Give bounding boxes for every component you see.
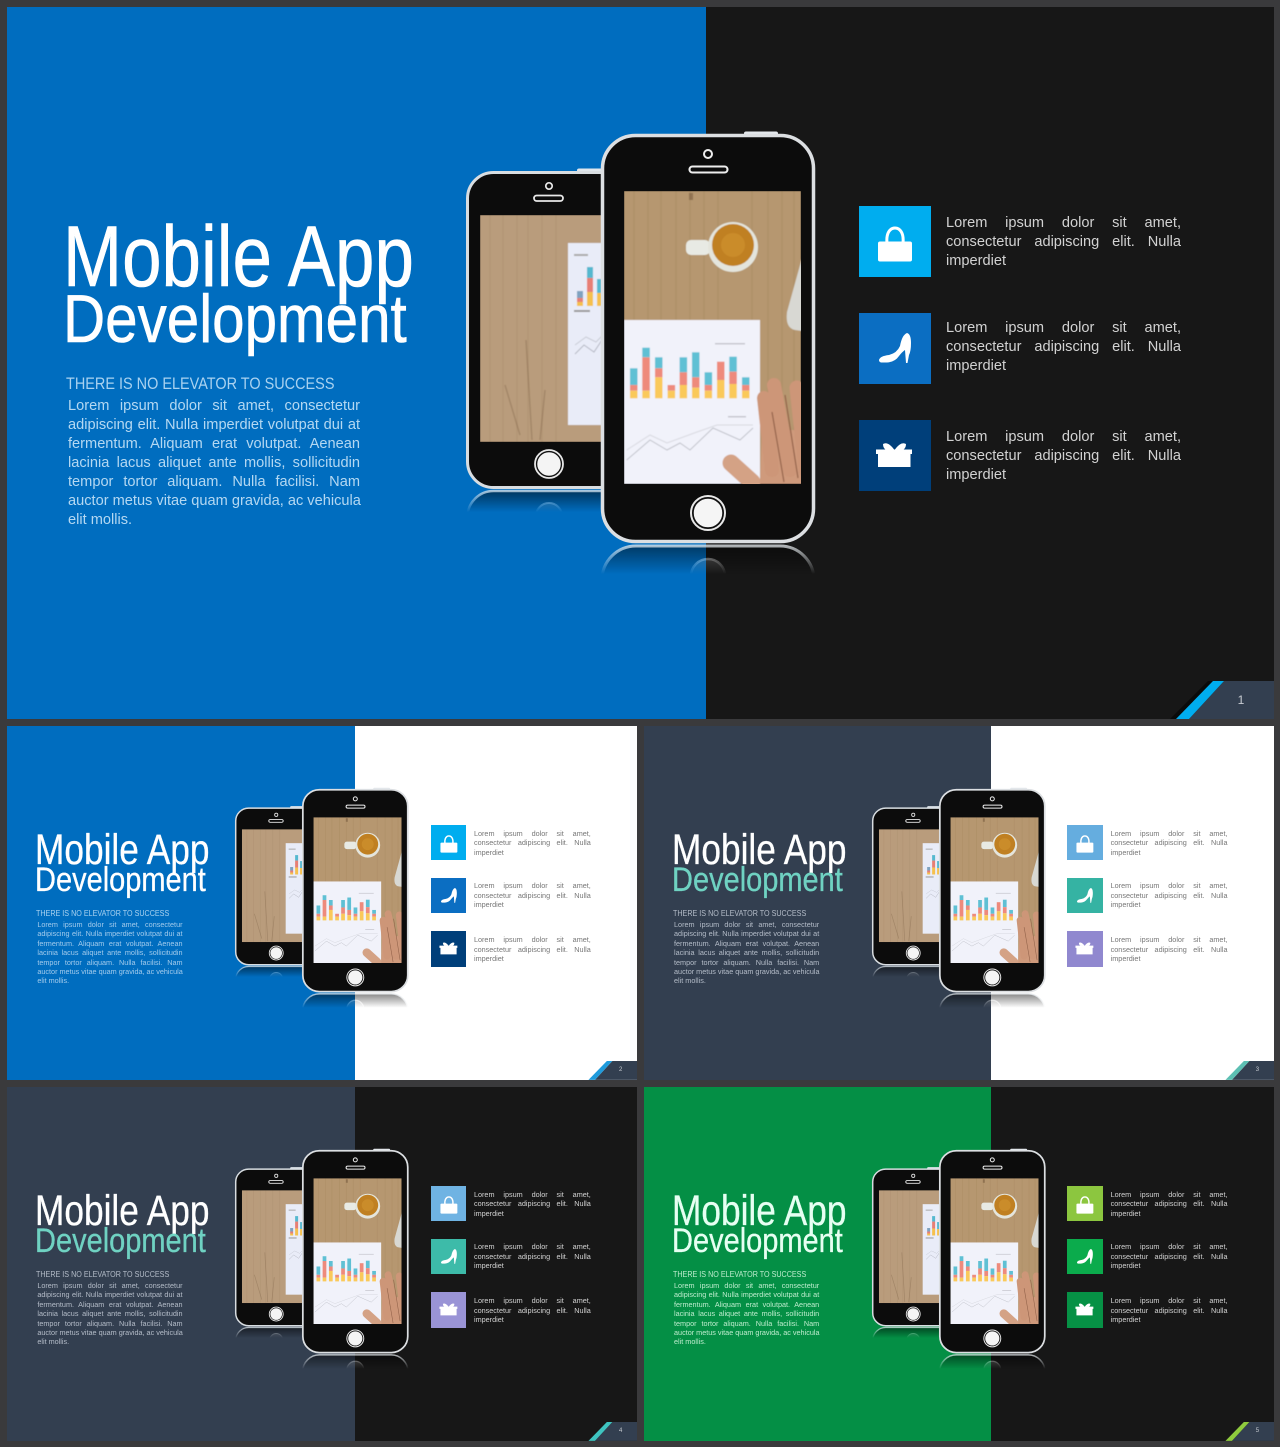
feature text 2: consectetur adipiscing elit. Nulla: [946, 339, 1181, 355]
corner accent: [1226, 1061, 1274, 1080]
feature text 1: consectetur adipiscing elit. Nulla: [474, 1199, 591, 1208]
body text: lacinia lacus aliquet ante mollis, sollicitudin: [68, 455, 360, 471]
body text: lacinia lacus aliquet ante mollis, sollicitudin: [37, 1309, 183, 1318]
subheading: THERE IS NO ELEVATOR TO SUCCESS: [673, 908, 806, 918]
title: Development: [63, 281, 407, 357]
feature text 3: consectetur adipiscing elit. Nulla: [1111, 1306, 1228, 1315]
feature text 1: Lorem ipsum dolor sit amet,: [474, 1190, 591, 1199]
slide 1: blue and black large slide: [7, 7, 1274, 719]
icon: gift: [1067, 931, 1103, 967]
feature text 2: [474, 881, 591, 909]
subheading: THERE IS NO ELEVATOR TO SUCCESS: [673, 1268, 806, 1278]
slide 3: navy and white: [644, 726, 1274, 1080]
feature text 3: imperdiet: [1111, 954, 1140, 963]
feature text 3: Lorem ipsum dolor sit amet,: [946, 429, 1181, 445]
body text: adipiscing elit. Nulla imperdiet volutpat dui at: [37, 1290, 183, 1299]
body text: tempor tortor aliquam. Nulla facilisi. Nam: [37, 1319, 183, 1328]
body text: [37, 1281, 183, 1346]
feature text 2: Lorem ipsum dolor sit amet,: [474, 881, 591, 890]
body text: tempor tortor aliquam. Nulla facilisi. Nam: [37, 958, 183, 967]
corner accent: [1170, 681, 1274, 719]
phones mockup: [234, 788, 409, 1007]
title: Development: [35, 861, 206, 899]
body text: elit mollis.: [674, 1337, 706, 1346]
icon: gift: [431, 1292, 466, 1328]
feature text 1: imperdiet: [474, 1209, 504, 1218]
feature text 1: consectetur adipiscing elit. Nulla: [946, 234, 1181, 250]
icon: high heel: [1067, 878, 1103, 913]
feature text 3: Lorem ipsum dolor sit amet,: [1111, 1296, 1228, 1305]
body text: auctor metus vitae quam gravida, ac vehicula: [37, 967, 183, 976]
page number: 2: [619, 1067, 622, 1073]
body text: tempor tortor aliquam. Nulla facilisi. Nam: [68, 474, 360, 490]
feature text 3: imperdiet: [1111, 1315, 1140, 1324]
feature text 2: consectetur adipiscing elit. Nulla: [1111, 1252, 1228, 1261]
body text: Lorem ipsum dolor sit amet, consectetur: [37, 920, 183, 929]
title: Development: [35, 1222, 206, 1260]
icon: high heel: [1067, 1239, 1103, 1274]
slide 5: green and black: [644, 1087, 1274, 1441]
body text: adipiscing elit. Nulla imperdiet volutpat dui at: [68, 417, 360, 433]
subheading: THERE IS NO ELEVATOR TO SUCCESS: [36, 908, 170, 918]
panel: blue left panel: [7, 7, 706, 719]
feature text 2: [1110, 1242, 1228, 1270]
body text: elit mollis.: [68, 512, 132, 528]
feature text 3: consectetur adipiscing elit. Nulla: [1111, 945, 1228, 954]
title: Mobile App: [35, 1187, 209, 1235]
body text: [68, 398, 361, 528]
body text: elit mollis.: [37, 976, 69, 985]
title: Development: [672, 1222, 842, 1260]
feature text 1: consectetur adipiscing elit. Nulla: [1111, 838, 1228, 847]
feature text 3: imperdiet: [946, 467, 1006, 483]
feature text 2: imperdiet: [474, 900, 504, 909]
icon: gift: [1067, 1292, 1103, 1328]
feature text 1: imperdiet: [1111, 848, 1140, 857]
title: Mobile App: [672, 1187, 846, 1235]
body text: elit mollis.: [37, 1337, 69, 1346]
slide 4: navy and black: [7, 1087, 637, 1441]
panel: navy left panel: [7, 1087, 355, 1441]
page number: 3: [1256, 1067, 1259, 1073]
feature text 2: [474, 1242, 591, 1270]
page number: 4: [619, 1428, 622, 1434]
icon: high heel: [431, 878, 466, 913]
feature text 1: Lorem ipsum dolor sit amet,: [474, 829, 591, 838]
body text: [674, 920, 820, 985]
body text: fermentum. Aliquam erat volutpat. Aenean: [68, 436, 360, 452]
feature text 1: [1110, 1190, 1228, 1218]
icon: gift: [859, 420, 931, 491]
feature text 3: consectetur adipiscing elit. Nulla: [474, 945, 591, 954]
page number: 1: [1238, 693, 1244, 707]
body text: fermentum. Aliquam erat volutpat. Aenean: [37, 939, 183, 948]
feature text 2: [946, 320, 1181, 374]
feature text 3: [474, 1296, 591, 1324]
icon: handbag: [1067, 825, 1103, 860]
icon: handbag: [859, 206, 931, 277]
body text: adipiscing elit. Nulla imperdiet volutpat dui at: [37, 929, 183, 938]
body text: [37, 920, 183, 985]
body text: lacinia lacus aliquet ante mollis, sollicitudin: [674, 948, 819, 957]
feature text 2: Lorem ipsum dolor sit amet,: [474, 1242, 591, 1251]
feature text 2: imperdiet: [1111, 1261, 1140, 1270]
body text: auctor metus vitae quam gravida, ac vehicula: [674, 1328, 820, 1337]
phones mockup: [234, 1148, 409, 1368]
feature text 2: [1110, 881, 1228, 909]
panel: white right panel: [355, 726, 637, 1080]
phones mockup: [872, 1148, 1046, 1368]
feature text 1: consectetur adipiscing elit. Nulla: [474, 838, 591, 847]
feature text 3: [1110, 1296, 1228, 1324]
icon: handbag: [431, 825, 466, 860]
feature text 3: consectetur adipiscing elit. Nulla: [474, 1306, 591, 1315]
feature text 2: consectetur adipiscing elit. Nulla: [1111, 891, 1228, 900]
feature text 3: Lorem ipsum dolor sit amet,: [1111, 935, 1228, 944]
icon: handbag: [1067, 1186, 1103, 1221]
feature text 2: imperdiet: [1111, 900, 1140, 909]
feature text 2: consectetur adipiscing elit. Nulla: [474, 891, 591, 900]
feature text 3: [946, 429, 1181, 483]
subheading: THERE IS NO ELEVATOR TO SUCCESS: [66, 374, 334, 393]
icon: handbag: [431, 1186, 466, 1221]
panel: navy left panel: [644, 726, 991, 1080]
title: [672, 1187, 846, 1260]
feature text 1: consectetur adipiscing elit. Nulla: [1111, 1199, 1228, 1208]
phones mockup: [466, 132, 816, 572]
feature text 3: [474, 935, 591, 963]
body text: adipiscing elit. Nulla imperdiet volutpat dui at: [674, 929, 819, 938]
body text: auctor metus vitae quam gravida, ac vehicula: [68, 493, 361, 509]
panel: white right panel: [991, 726, 1274, 1080]
body text: fermentum. Aliquam erat volutpat. Aenean: [674, 939, 819, 948]
body text: Lorem ipsum dolor sit amet, consectetur: [37, 1281, 183, 1290]
title: [35, 826, 209, 899]
title: Mobile App: [63, 209, 414, 305]
feature text 1: imperdiet: [1111, 1209, 1140, 1218]
title: Mobile App: [672, 826, 846, 874]
feature text 3: [1110, 935, 1228, 963]
title: Development: [672, 861, 842, 899]
icon: high heel: [431, 1239, 466, 1274]
feature text 1: [474, 829, 591, 857]
body text: lacinia lacus aliquet ante mollis, sollicitudin: [37, 948, 183, 957]
body text: auctor metus vitae quam gravida, ac vehicula: [37, 1328, 183, 1337]
panel: green left panel: [644, 1087, 991, 1441]
feature text 1: Lorem ipsum dolor sit amet,: [946, 215, 1181, 231]
feature text 2: Lorem ipsum dolor sit amet,: [1111, 881, 1228, 890]
title: [672, 826, 846, 899]
panel: blue left panel: [7, 726, 355, 1080]
corner accent: [588, 1422, 637, 1441]
body text: [674, 1281, 820, 1346]
body text: elit mollis.: [674, 976, 706, 985]
body text: tempor tortor aliquam. Nulla facilisi. Nam: [674, 1319, 819, 1328]
panel: black right panel: [991, 1087, 1274, 1441]
feature text 1: Lorem ipsum dolor sit amet,: [1111, 1190, 1228, 1199]
feature text 1: imperdiet: [946, 253, 1006, 269]
body text: tempor tortor aliquam. Nulla facilisi. Nam: [674, 958, 819, 967]
body text: fermentum. Aliquam erat volutpat. Aenean: [37, 1300, 183, 1309]
feature text 3: imperdiet: [474, 1315, 504, 1324]
feature text 1: Lorem ipsum dolor sit amet,: [1111, 829, 1228, 838]
panel: black right panel: [355, 1087, 637, 1441]
body text: Lorem ipsum dolor sit amet, consectetur: [674, 1281, 819, 1290]
body text: Lorem ipsum dolor sit amet, consectetur: [674, 920, 819, 929]
feature text 2: imperdiet: [474, 1261, 504, 1270]
body text: adipiscing elit. Nulla imperdiet volutpat dui at: [674, 1290, 819, 1299]
feature text 1: [474, 1190, 591, 1218]
body text: fermentum. Aliquam erat volutpat. Aenean: [674, 1300, 819, 1309]
phones mockup: [872, 788, 1046, 1007]
panel: black right panel: [706, 7, 1274, 719]
slide 2: blue and white: [7, 726, 637, 1080]
feature text 3: Lorem ipsum dolor sit amet,: [474, 935, 591, 944]
feature text 2: Lorem ipsum dolor sit amet,: [946, 320, 1181, 336]
feature text 2: Lorem ipsum dolor sit amet,: [1111, 1242, 1228, 1251]
title: [35, 1187, 209, 1260]
feature text 2: imperdiet: [946, 358, 1006, 374]
feature text 3: imperdiet: [474, 954, 504, 963]
page number: 5: [1256, 1428, 1259, 1434]
body text: Lorem ipsum dolor sit amet, consectetur: [68, 398, 360, 414]
subheading: THERE IS NO ELEVATOR TO SUCCESS: [36, 1268, 170, 1278]
feature text 1: imperdiet: [474, 848, 504, 857]
body text: auctor metus vitae quam gravida, ac vehicula: [674, 967, 820, 976]
feature text 1: [1110, 829, 1228, 857]
icon: high heel: [859, 313, 931, 384]
body text: lacinia lacus aliquet ante mollis, sollicitudin: [674, 1309, 819, 1318]
title: Mobile App: [35, 826, 209, 874]
feature text 2: consectetur adipiscing elit. Nulla: [474, 1252, 591, 1261]
icon: gift: [431, 931, 466, 967]
feature text 3: Lorem ipsum dolor sit amet,: [474, 1296, 591, 1305]
title: [63, 209, 414, 357]
feature text 3: consectetur adipiscing elit. Nulla: [946, 448, 1181, 464]
feature text 1: [946, 215, 1181, 269]
corner accent: [588, 1061, 637, 1080]
corner accent: [1226, 1422, 1274, 1441]
